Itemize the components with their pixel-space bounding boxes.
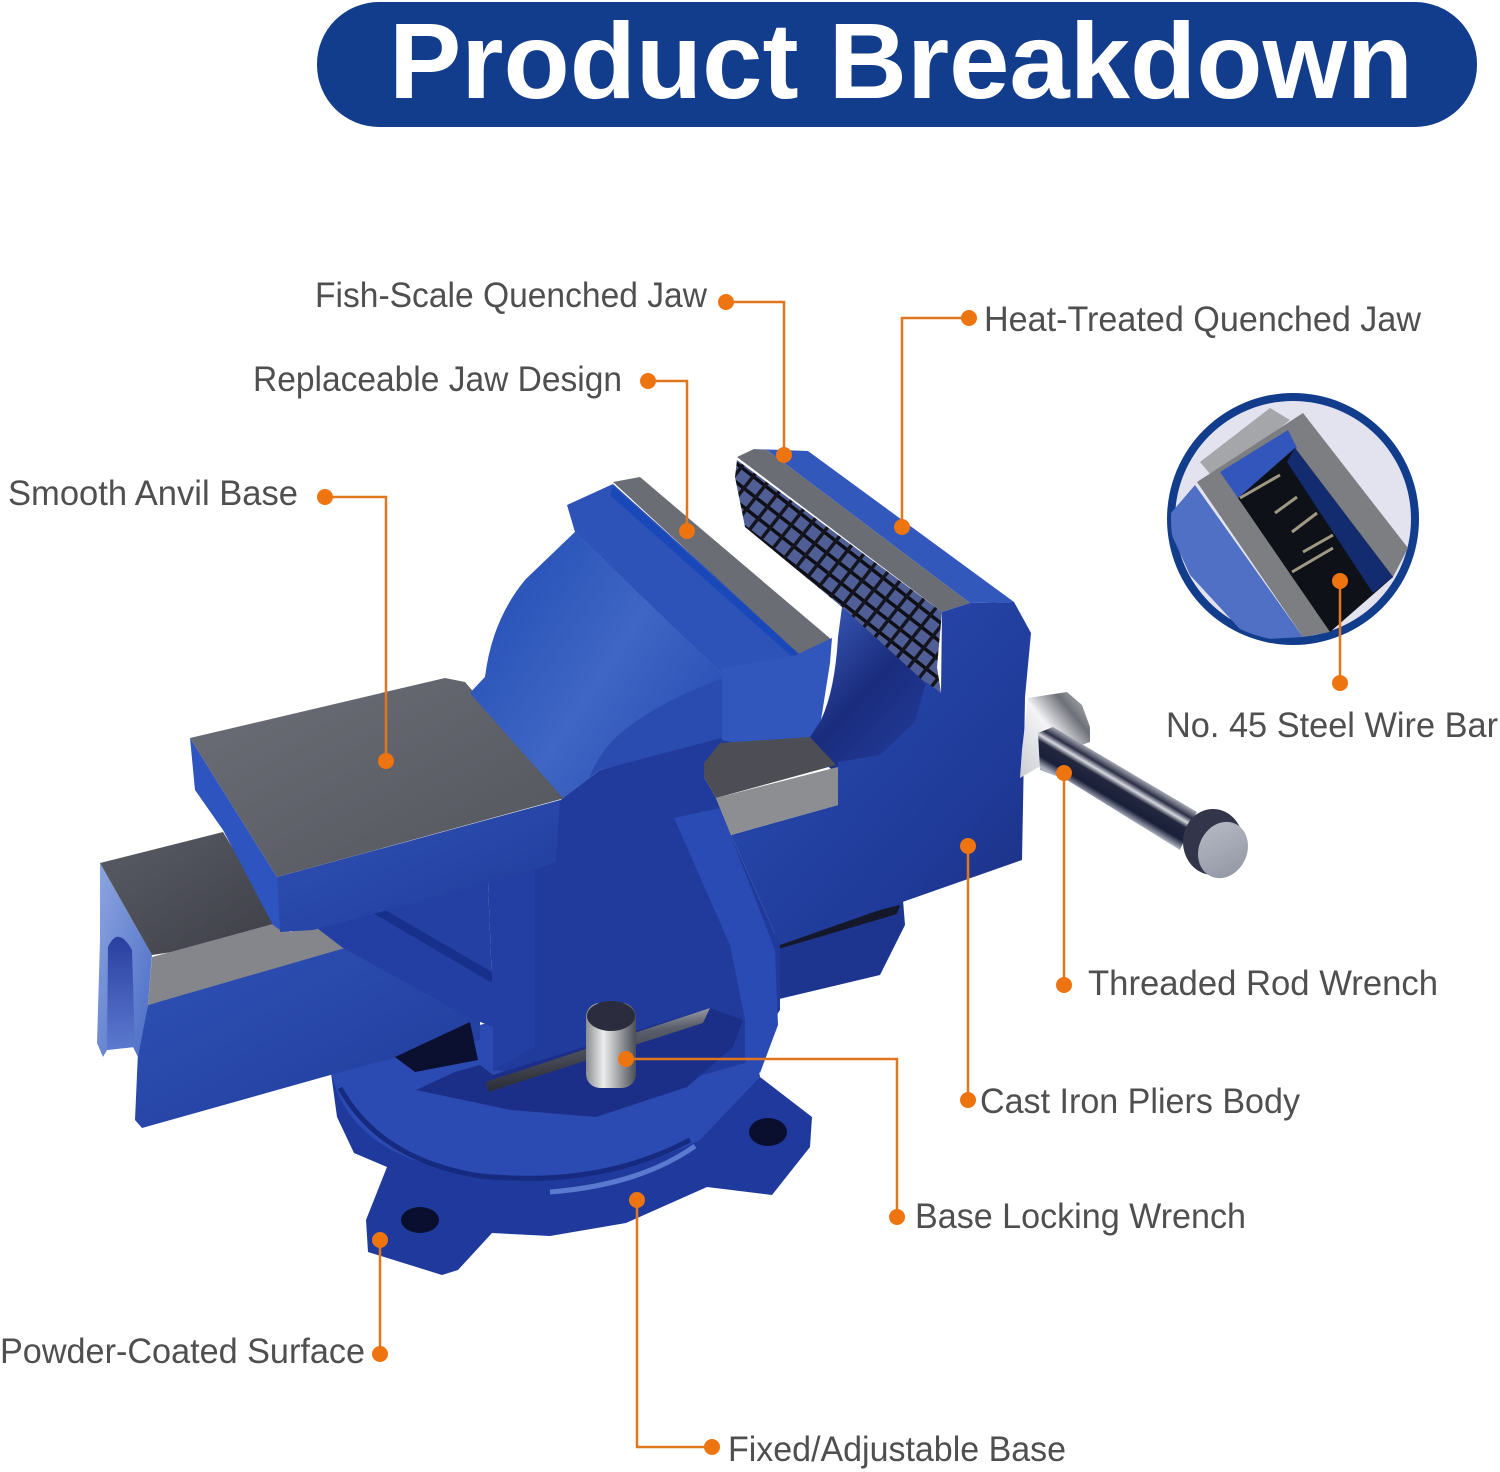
- swivel platter: [416, 1008, 743, 1117]
- callout: Smooth Anvil Base: Smooth Anvil Base: [8, 474, 298, 513]
- callout: Powder-Coated Surface: Powder-Coated Surface: [0, 1332, 365, 1371]
- callout: Fixed/Adjustable Base: Fixed/Adjustable Base: [728, 1430, 1066, 1469]
- front jaw: [567, 477, 832, 745]
- inset: steel wire bar: [1165, 393, 1419, 645]
- callout: Heat-Treated Quenched Jaw: Heat-Treated Quenched Jaw: [984, 300, 1422, 339]
- rear rail: [97, 832, 480, 1128]
- callout: Threaded Rod Wrench: Threaded Rod Wrench: [1088, 964, 1438, 1003]
- anvil: [190, 678, 565, 932]
- title: Product Breakdown: [389, 0, 1413, 121]
- callout: Heat-Treated Quenched Jaw: [894, 300, 1422, 535]
- callout: Replaceable Jaw Design: [253, 360, 695, 539]
- callout: No. 45 Steel Wire Bar: No. 45 Steel Wire Bar: [1166, 706, 1498, 745]
- moving jaw lower guide: [770, 900, 905, 1000]
- callout: Threaded Rod Wrench: [1056, 765, 1438, 1003]
- callout: Replaceable Jaw Design: Replaceable Jaw Design: [253, 360, 622, 399]
- callout: Fish-Scale Quenched Jaw: [315, 276, 792, 463]
- callout: Cast Iron Pliers Body: Cast Iron Pliers Body: [980, 1082, 1300, 1121]
- callout: Cast Iron Pliers Body: [960, 838, 1300, 1121]
- callout: Base Locking Wrench: [618, 1051, 1246, 1236]
- horn: [470, 532, 725, 798]
- centre column: [313, 735, 810, 1090]
- swivel base: [331, 1000, 812, 1275]
- callout: Fixed/Adjustable Base: [629, 1192, 1066, 1469]
- slide bar: [704, 737, 838, 835]
- threaded rod wrench: [1020, 692, 1257, 886]
- callout: Fish-Scale Quenched Jaw: Fish-Scale Quenched Jaw: [315, 276, 708, 315]
- callout: Smooth Anvil Base: [8, 474, 394, 769]
- illustration: bench vise: [97, 449, 1257, 1275]
- callout: Base Locking Wrench: Base Locking Wrench: [915, 1197, 1246, 1236]
- callout: Powder-Coated Surface: [0, 1232, 388, 1371]
- rear jaw: [731, 449, 1031, 945]
- callout: No. 45 Steel Wire Bar: [1166, 573, 1498, 745]
- base locking wrench: [486, 1001, 710, 1092]
